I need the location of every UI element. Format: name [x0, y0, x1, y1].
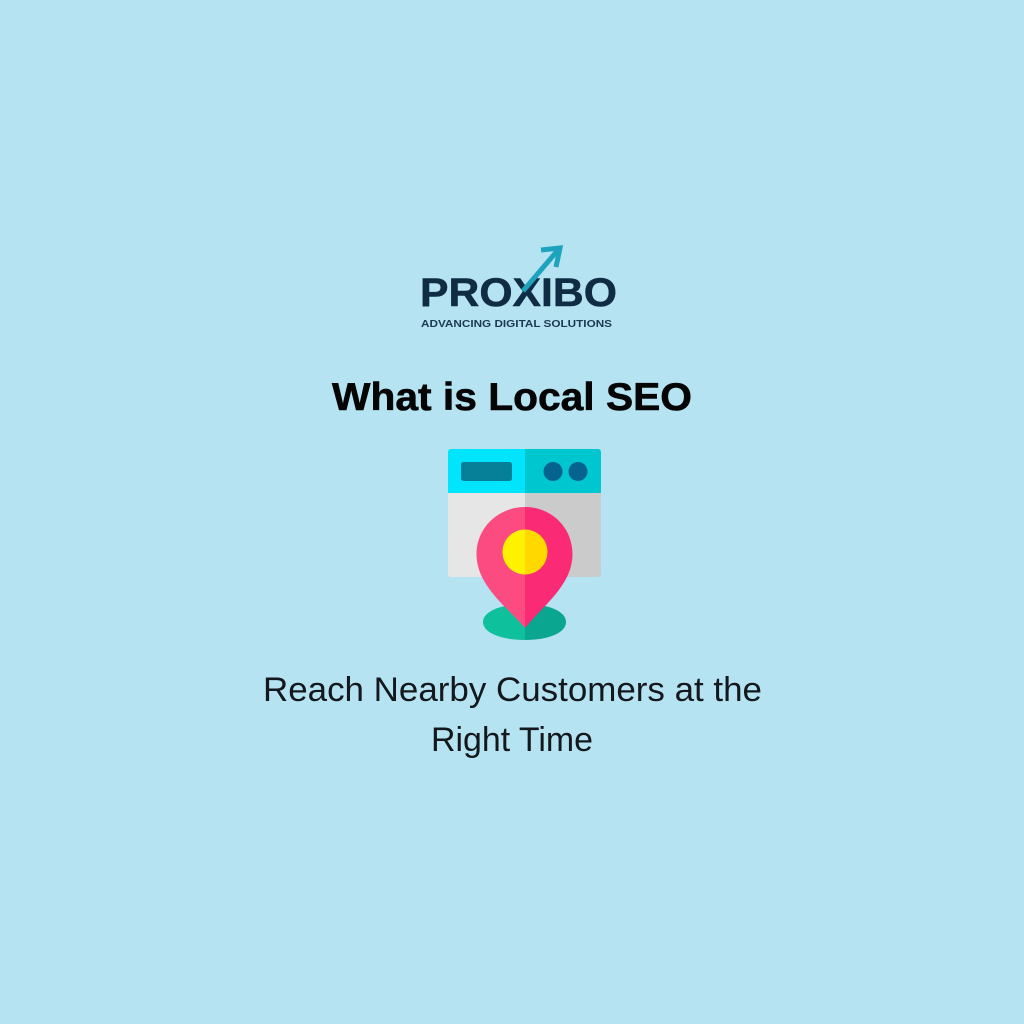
browser window header	[448, 449, 601, 493]
subtitle	[263, 671, 762, 759]
logo: Proxibo	[420, 248, 617, 330]
logo tagline: ADVANCING DIGITAL SOLUTIONS	[421, 318, 612, 330]
subtitle line 1: Reach Nearby Customers at the	[263, 671, 762, 709]
address bar	[461, 462, 512, 481]
icon: browser window with location pin	[448, 449, 601, 640]
pin centre	[502, 530, 548, 574]
window control dots	[544, 462, 588, 481]
logo arrow	[523, 248, 560, 291]
logo wordmark: PROXIBO	[420, 271, 617, 315]
subtitle line 2: Right Time	[431, 721, 593, 759]
title: What is Local SEO	[332, 376, 692, 419]
pin shadow ellipse	[483, 604, 566, 640]
location pin	[476, 507, 572, 628]
browser window body	[448, 493, 601, 577]
